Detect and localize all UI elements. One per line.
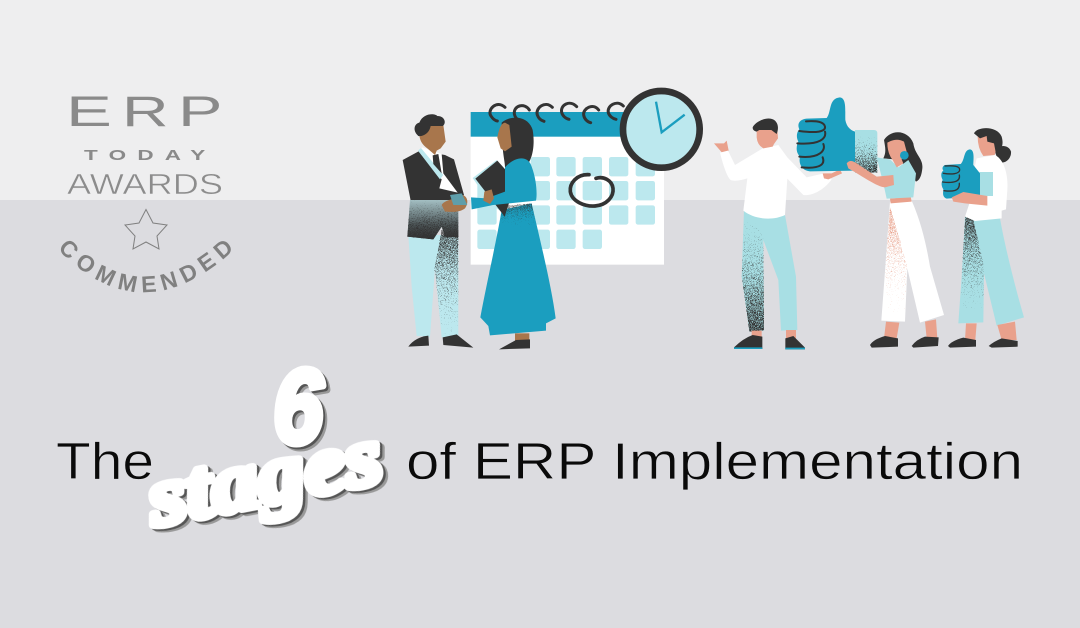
hair xyxy=(753,119,778,134)
calendar rings xyxy=(490,103,623,123)
hand on folder xyxy=(483,189,494,204)
ponytail xyxy=(995,146,1011,163)
head xyxy=(757,128,778,148)
figure: woman in white trousers xyxy=(847,132,944,348)
shoes xyxy=(408,336,429,347)
figure: man in white xyxy=(714,119,842,349)
trousers xyxy=(408,235,458,337)
trousers xyxy=(881,201,944,323)
figure: woman in hijab xyxy=(471,118,556,349)
holding arm xyxy=(952,192,987,206)
left hand xyxy=(714,141,729,153)
foot and shoe xyxy=(515,333,529,342)
background: lower band xyxy=(0,200,1080,628)
dress xyxy=(480,203,556,335)
torso and arms xyxy=(720,145,832,219)
sleeve xyxy=(471,158,537,209)
AWARDS wordmark: AWARDS xyxy=(67,169,223,201)
face xyxy=(978,135,997,156)
figure: woman with ponytail xyxy=(941,128,1024,348)
trousers xyxy=(958,217,1024,326)
head covering xyxy=(502,118,534,167)
hair xyxy=(974,128,1003,154)
face xyxy=(497,123,512,151)
right hand xyxy=(823,169,842,179)
face xyxy=(887,140,907,167)
thumb finger lines xyxy=(797,121,825,168)
icon: clock xyxy=(623,91,700,168)
feet and shoes xyxy=(884,319,937,338)
COMMENDED curved text: COMMENDED xyxy=(60,240,231,292)
top xyxy=(877,157,916,199)
icon: large thumbs up xyxy=(797,97,877,173)
background: upper band xyxy=(0,0,1080,200)
feet and shoes xyxy=(752,330,796,338)
feet and shoes xyxy=(965,322,1017,340)
title: The: The xyxy=(56,433,154,491)
ERP logo: E xyxy=(66,88,112,136)
ERP logo xyxy=(66,87,222,136)
folder xyxy=(473,160,515,213)
hands xyxy=(442,195,467,212)
jacket xyxy=(403,151,464,239)
hair xyxy=(415,114,445,136)
award badge xyxy=(60,87,231,292)
ERP logo: P xyxy=(178,87,222,135)
figure: man in suit xyxy=(403,114,473,348)
script number 6: 6 xyxy=(273,348,324,466)
trousers xyxy=(742,210,797,332)
arm xyxy=(847,161,894,187)
illustration: team with thumbs up xyxy=(714,97,1024,349)
shirt xyxy=(965,155,1007,221)
title xyxy=(56,348,1023,545)
TODAY wordmark: TODAY xyxy=(84,147,216,164)
small thumbs up icon xyxy=(941,149,980,199)
title: of ERP Implementation: of ERP Implementation xyxy=(406,433,1023,491)
hair back xyxy=(883,132,922,182)
waist xyxy=(890,197,912,203)
illustration: handshake and calendar xyxy=(403,91,700,349)
earring xyxy=(900,151,909,160)
small thumb sleeve xyxy=(979,172,993,196)
ERP logo: R xyxy=(122,87,169,135)
icon: star xyxy=(125,210,167,249)
script word stages: stages xyxy=(139,408,389,545)
shirt and tie xyxy=(418,147,458,193)
calendar date cells xyxy=(477,157,655,249)
scribbled date circle xyxy=(570,175,613,206)
calendar xyxy=(471,103,664,265)
head xyxy=(419,125,446,155)
